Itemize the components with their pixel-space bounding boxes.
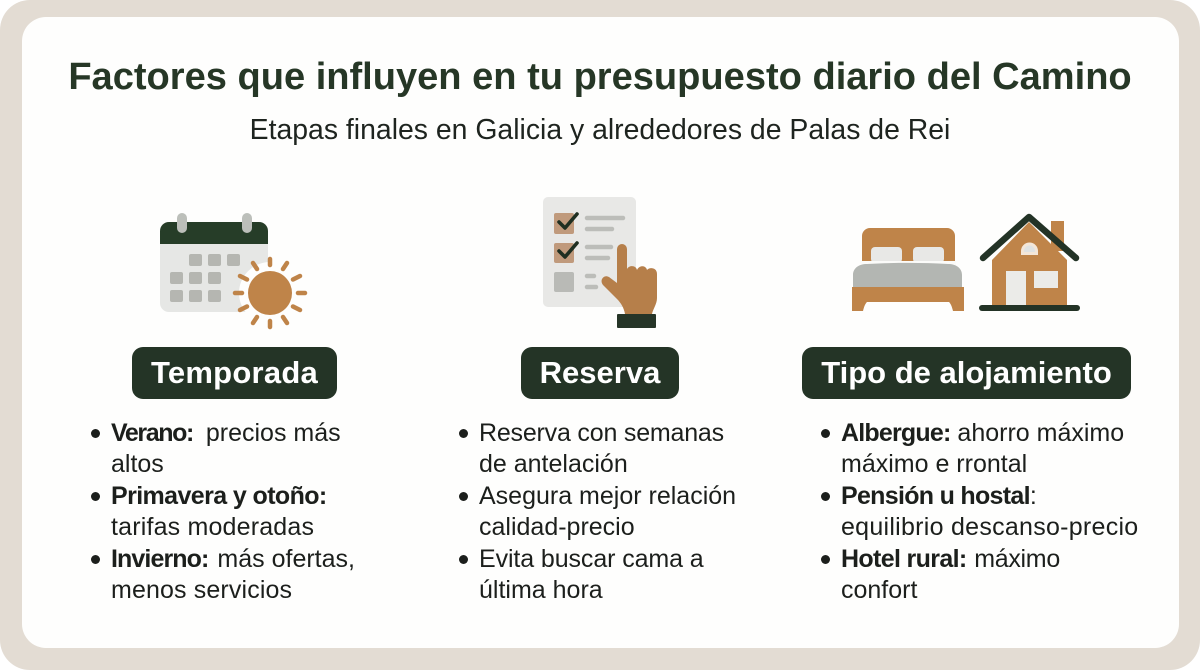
icon: bed and house: [852, 214, 1080, 311]
heading: Tipo de alojamiento: Tipo de alojamiento: [821, 355, 1112, 390]
heading: Reserva: Reserva: [540, 355, 660, 390]
title: Factores que influyen en tu presupuesto diario del Camino: [68, 56, 1132, 98]
heading: Tipo de alojamiento: [802, 347, 1131, 399]
text block: Temporada list: altos: [111, 450, 164, 478]
icon: calendar and sun: [160, 213, 308, 330]
text block: Tipo de alojamiento list: [821, 419, 1138, 604]
text block: Reserva list: Evita buscar cama a: [479, 545, 704, 573]
heading: Temporada: Temporada: [151, 355, 318, 390]
text block: Temporada list: [91, 419, 355, 604]
text block: Reserva list: Asegura mejor relación: [479, 482, 736, 510]
text block: Reserva list: de antelación: [479, 450, 628, 478]
text block: Temporada list: tarifas moderadas: [111, 513, 314, 541]
text block: Tipo de alojamiento list: equilibrio descanso-precio: [841, 513, 1138, 541]
heading: Temporada: [132, 347, 337, 399]
icon: checklist and hand: [543, 197, 657, 328]
text block: Tipo de alojamiento list: Albergue: ahorro máximo: [841, 419, 1124, 447]
subtitle: Etapas finales en Galicia y alrededores de Palas de Rei: [250, 114, 950, 146]
text block: Temporada list: menos servicios: [111, 576, 292, 604]
text block: Reserva list: última hora: [479, 576, 603, 604]
text block: Tipo de alojamiento list: confort: [841, 576, 917, 604]
text block: Tipo de alojamiento list: Pensión u hostal:: [841, 482, 1037, 510]
text block: Temporada list: Verano: precios más: [111, 419, 341, 447]
text block: Reserva list: [459, 419, 736, 604]
text block: Reserva list: Reserva con semanas: [479, 419, 724, 447]
text block: Tipo de alojamiento list: Hotel rural: máximo: [841, 545, 1060, 573]
text block: Reserva list: calidad-precio: [479, 513, 635, 541]
text block: Tipo de alojamiento list: máximo e rrontal: [841, 450, 1027, 478]
text block: Temporada list: Primavera y otoño:: [111, 482, 327, 510]
heading: Reserva: [521, 347, 679, 399]
text block: Temporada list: Invierno: más ofertas,: [111, 545, 355, 573]
